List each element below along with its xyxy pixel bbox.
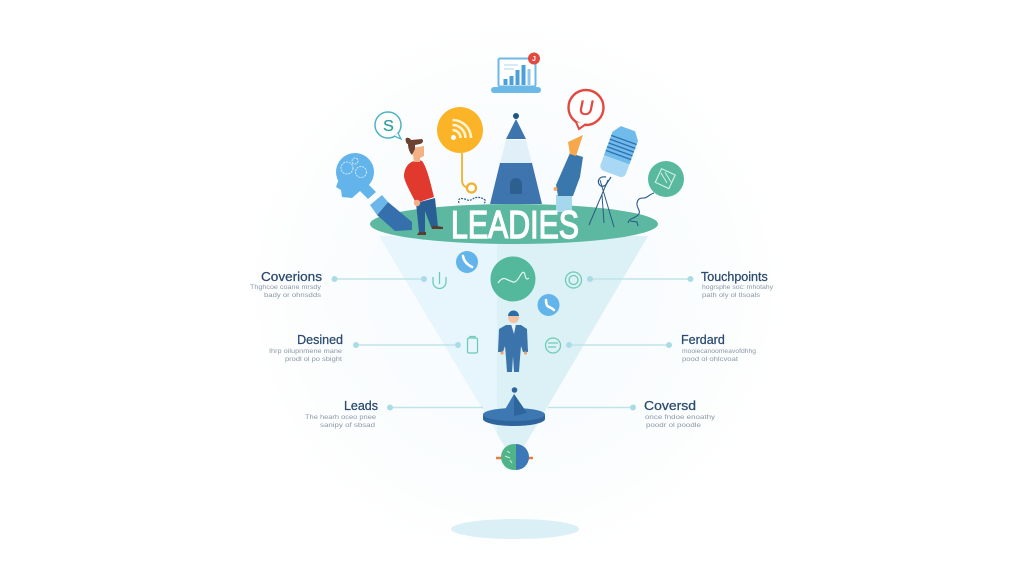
icon: head with ideas xyxy=(336,153,376,199)
left label: Leads: The hearh oceo pnee xyxy=(305,415,377,421)
right label: Coversd: poodr ol poodle xyxy=(646,423,702,429)
left label: Leads: sanipy of sbsad xyxy=(320,423,375,429)
icon: target xyxy=(566,272,582,288)
person in red xyxy=(404,138,443,235)
icon: green chart circle xyxy=(490,256,536,302)
right label: Coversd: Coversd xyxy=(644,399,696,413)
right label: Touchpoints: path oly ol tlsoals xyxy=(702,293,760,299)
funnel title: LEADIES xyxy=(451,204,579,247)
platform with cone xyxy=(483,387,545,426)
central tower xyxy=(490,113,542,204)
right label: Ferdard: mooiecanoomeavofdhhg xyxy=(682,349,756,355)
businessman xyxy=(498,310,528,372)
left label: Coverions: Thghcoe coane mrsdy xyxy=(250,285,321,291)
left label: Desined: prodl ol po sbight xyxy=(285,357,342,363)
funnel cone xyxy=(379,236,648,450)
icon: speech bubble S xyxy=(375,112,401,139)
microphone on tripod xyxy=(589,124,641,227)
icon: wifi pin xyxy=(437,107,485,203)
icon: laptop with chart: J xyxy=(532,56,536,63)
icon: phone circle right xyxy=(538,294,560,316)
icon: touch xyxy=(433,272,446,288)
icon: phone circle left xyxy=(456,251,478,273)
left label: Leads: Leads xyxy=(344,399,378,413)
right label: Ferdard xyxy=(566,333,756,363)
right label: Ferdard: pood ol ohlcvoat xyxy=(682,357,738,363)
right label: Coversd xyxy=(548,399,715,429)
left label: Desined: Desined xyxy=(297,333,343,347)
right label: Ferdard: Ferdard xyxy=(681,333,725,347)
bottom shadow ellipse xyxy=(451,519,579,539)
icon: green circle with squiggle cable xyxy=(628,161,684,226)
left label: Coverions: Coverions xyxy=(261,270,322,284)
icon: red U bubble: U xyxy=(578,97,594,120)
person in blue xyxy=(554,135,583,212)
right label: Coversd: once fndoe enoathy xyxy=(645,415,715,421)
right label: Touchpoints: hogrsphe soc: mhotahy xyxy=(702,285,773,291)
left label: Coverions: bady or ohnsdds xyxy=(264,293,321,299)
right label: Touchpoints xyxy=(587,270,773,299)
icon: red U bubble xyxy=(568,90,604,129)
left label: Desined xyxy=(269,333,461,363)
right label: Touchpoints: Touchpoints xyxy=(701,270,768,284)
icon: speech bubble S: S xyxy=(383,118,394,135)
icon: card xyxy=(546,338,560,353)
globe with arrows xyxy=(496,444,533,470)
left label: Desined: Ihrp oilupnmene mane xyxy=(269,349,343,355)
icon: laptop with chart xyxy=(491,52,541,93)
funnel top disc xyxy=(370,204,658,244)
left label: Coverions xyxy=(250,270,427,299)
icon: clipboard xyxy=(468,336,478,353)
left label: Leads xyxy=(305,399,483,429)
blue pen xyxy=(370,195,412,231)
